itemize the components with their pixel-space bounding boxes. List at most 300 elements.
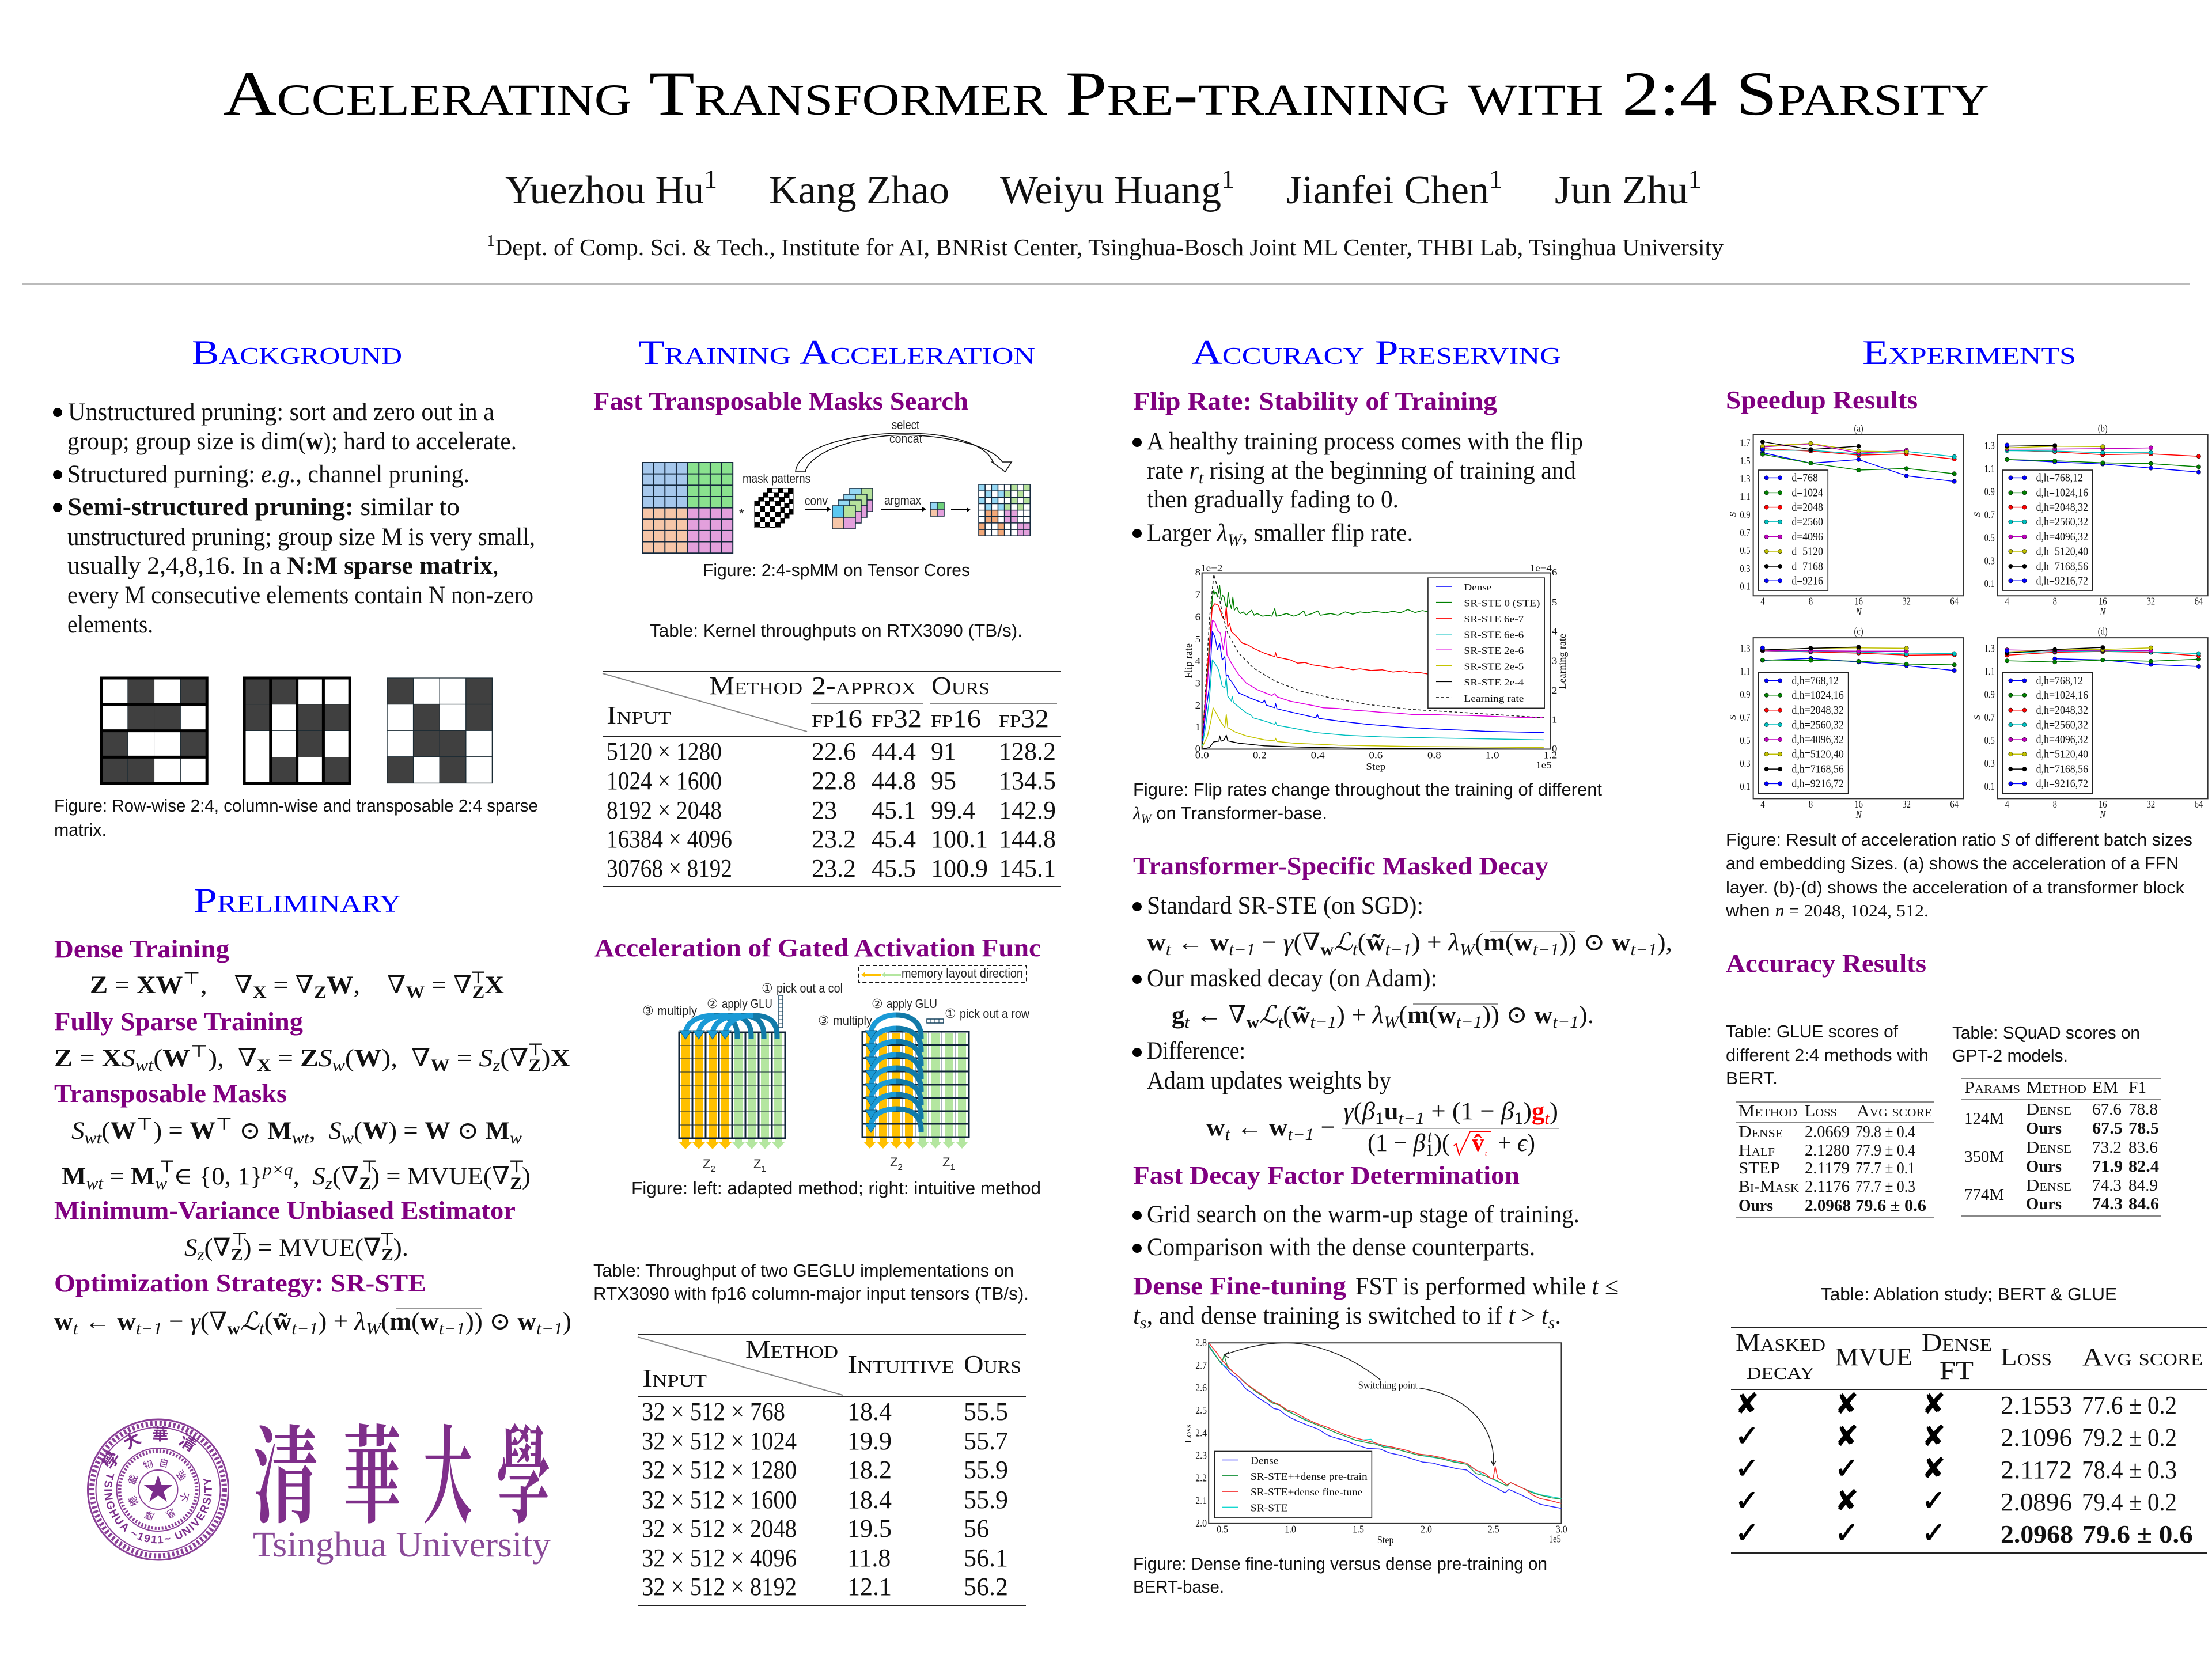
equation: sr-ste update: t−1	[439, 1319, 465, 1338]
table: glue scores: 77.7 ± 0.1	[1855, 1159, 1915, 1177]
table: squad scores: Ours	[2026, 1157, 2062, 1176]
chart: speedup panel b: d,h=2048,32	[2036, 501, 2088, 513]
table: kernel throughputs: 128.2	[999, 737, 1056, 766]
chart: speedup panel a: (a)	[1854, 422, 1863, 434]
arrow: select concat	[796, 433, 1012, 472]
bullet: difference	[1132, 1037, 1391, 1094]
input grid	[642, 463, 733, 553]
table: ablation study: 79.2 ± 0.2	[2082, 1423, 2177, 1452]
chart: speedup panel d: 16	[2099, 798, 2107, 810]
chart: speedup panel a	[1728, 422, 1964, 618]
equation: transposable masks first line: wt	[292, 1128, 309, 1147]
curve: sr-ste 0	[1202, 585, 1428, 748]
equation: masked decay: w	[1247, 1012, 1260, 1032]
equation: masked decay: ← ∇	[1190, 1002, 1247, 1029]
table: geglu throughput: 55.5	[964, 1397, 1008, 1426]
logotype: chinese name	[253, 1391, 551, 1544]
legend: flip rate: SR-STE 6e-6	[1464, 629, 1524, 640]
equation: transposable masks first line: (	[101, 1118, 110, 1145]
table: squad scores: Dense	[2026, 1100, 2071, 1119]
right diagram: intuitive method	[862, 1015, 969, 1149]
caption: sparse matrix figure: matrix.	[54, 820, 107, 840]
equation: adam update: g	[1532, 1098, 1545, 1125]
legend: loss chart: SR-STE	[1251, 1502, 1288, 1514]
chart: speedup panel d: 8	[2053, 798, 2057, 810]
equation: dense training: W	[327, 972, 353, 999]
equation: adam update: w	[1269, 1114, 1287, 1141]
equation: sr-ste update: w	[517, 1308, 536, 1335]
table: glue scores	[1736, 1102, 1934, 1217]
chart: speedup panel b: (b)	[2098, 422, 2108, 434]
equation: transposable masks second line: (∇	[332, 1163, 359, 1190]
equation: sr-ste update: )	[563, 1308, 571, 1335]
chart: flip rate curves: 1e−4	[1530, 563, 1552, 573]
panel: experiments	[1725, 334, 2208, 1553]
feature map stack	[832, 488, 873, 529]
caption: sparse matrix figure	[54, 796, 538, 840]
table: ablation study: ✘	[1735, 1387, 1759, 1421]
authors: Weiyu Huang	[1000, 168, 1222, 213]
equation: masked decay: (	[1399, 1002, 1407, 1029]
table: geglu throughput: 18.4	[847, 1397, 892, 1426]
chart: speedup panel c: d,h=9216,72	[1791, 777, 1844, 790]
equation: masked decay: w	[1534, 1002, 1552, 1029]
curve: sr-ste 2e-5	[1202, 708, 1544, 748]
chart: dense fine-tuning loss: 2.8	[1195, 1337, 1207, 1349]
equation: sr-ste update: λ	[353, 1308, 366, 1335]
equation: transposable masks second line: =	[103, 1163, 131, 1190]
chart: speedup panel a: d=2560	[1791, 515, 1823, 528]
table: kernel throughputs: fp16	[931, 704, 981, 733]
table: ablation study: Masked	[1736, 1328, 1825, 1357]
equation: masked decay: t	[1184, 1012, 1190, 1032]
chart: speedup panel c: 0.9	[1740, 688, 1751, 700]
table: geglu throughput: 32 × 512 × 1280	[642, 1456, 797, 1484]
table: kernel throughputs: fp32	[999, 704, 1049, 733]
chart: speedup panel a: d=5120	[1791, 545, 1823, 558]
chart: dense fine-tuning loss: Loss	[1183, 1424, 1194, 1443]
right labels: Z	[942, 1155, 950, 1169]
annotation: switching point: Switching point	[1358, 1380, 1418, 1391]
table: geglu throughput: Ours	[964, 1350, 1021, 1378]
table: kernel throughputs: 45.4	[872, 825, 916, 853]
chart: flip rate curves: 6	[1552, 567, 1557, 578]
chart: speedup panel a: 1.5	[1740, 455, 1751, 467]
equation: sr-ste update: −	[162, 1308, 190, 1335]
chart: flip rate curves: Flip rate	[1183, 643, 1194, 678]
equation: transposable masks second line: w	[155, 1173, 167, 1193]
table: kernel throughputs: 95	[931, 767, 956, 795]
equation: masked decay: ).	[1579, 1002, 1594, 1029]
equation: adam update: (1 − β	[1368, 1130, 1426, 1157]
right labels: ③	[818, 1014, 830, 1028]
equation: standard update: t	[1166, 940, 1171, 959]
chart: flip rate curves: 8	[1195, 567, 1200, 578]
table: glue scores: 79.6 ± 0.6	[1855, 1196, 1926, 1215]
chart: speedup panel a: 32	[1902, 595, 1911, 607]
equation: adam update: 1	[1514, 1108, 1523, 1128]
legend: flip rate	[1428, 578, 1544, 708]
bullet list: pruning: Unstructured pruning: sort and zero out in a	[68, 399, 494, 426]
table: geglu throughput: 32 × 512 × 1024	[642, 1427, 797, 1455]
chart: speedup panel b: 32	[2147, 595, 2155, 607]
annotation: switching point	[1224, 1343, 1496, 1465]
equation: transposable masks second line: ∈ {0, 1}	[167, 1163, 263, 1190]
table: geglu throughput: 18.2	[847, 1456, 892, 1484]
curve: dense	[1202, 632, 1544, 746]
bullet list: flip rate	[1132, 428, 1583, 550]
table: glue scores: Half	[1738, 1141, 1775, 1160]
equation: masked decay: ) +	[1336, 1002, 1373, 1029]
label: mask patterns: mask patterns	[743, 471, 810, 486]
subheading: dense training: Dense Training	[54, 935, 229, 963]
equation: masked decay: λ	[1372, 1002, 1384, 1029]
table: squad scores: Dense	[2026, 1138, 2071, 1157]
arrow: argmax: argmax	[884, 493, 921, 507]
curve: dense pre-train	[1209, 1346, 1561, 1499]
table: ablation study: Dense	[1922, 1328, 1992, 1357]
equation: adam update: t	[1225, 1124, 1230, 1144]
legend: loss chart: SR-STE+dense fine-tune	[1251, 1487, 1362, 1498]
equation: sr-ste update: )) ⊙	[465, 1308, 517, 1335]
right labels: 1	[950, 1162, 955, 1172]
table: ablation study: 2.1172	[2001, 1456, 2072, 1484]
equation: sr-ste update: w	[227, 1319, 241, 1338]
equation: mvue: ).	[393, 1234, 408, 1262]
chart: speedup panel c: 0.3	[1740, 757, 1751, 769]
text block: dense fine-tuning: .	[1555, 1302, 1561, 1330]
chart: dense fine-tuning loss: 2.0	[1195, 1517, 1207, 1529]
chart: dense fine-tuning loss: 2.6	[1195, 1382, 1207, 1394]
authors: Yuezhou Hu	[505, 168, 706, 213]
table: geglu throughput: 55.7	[964, 1427, 1008, 1455]
left labels: multiply	[657, 1003, 697, 1018]
chart: speedup panel b: 8	[2053, 595, 2057, 607]
chart: flip rate curves: 2	[1195, 700, 1200, 711]
table: kernel throughputs: 22.6	[812, 737, 856, 766]
chart: speedup panel d: 1.1	[1984, 665, 1995, 677]
bullet list: pruning: unstructured pruning; group size M is very small,	[67, 524, 535, 551]
bullet list: pruning: usually 2,4,8,16. In a N:M sparse matrix,	[67, 552, 499, 579]
caption: flip rate figure: Figure: Flip rates change throughout the training of different	[1133, 779, 1602, 800]
equation: adam update: 1	[1375, 1108, 1384, 1128]
table: ablation study: MVUE	[1835, 1343, 1912, 1371]
table: kernel throughputs: Ours	[931, 672, 990, 700]
equation: sr-ste update: t	[259, 1319, 264, 1338]
table: geglu throughput: 19.5	[847, 1514, 892, 1543]
label: concat: concat	[889, 431, 922, 446]
equation: masked decay: t−1	[1552, 1012, 1579, 1032]
equation: sr-ste update: w	[54, 1308, 73, 1335]
logo: tsinghua university	[87, 1391, 551, 1565]
table: kernel throughputs: 91	[931, 737, 956, 766]
chart: speedup panel d: d,h=4096,32	[2036, 733, 2088, 746]
table: squad scores: 350M	[1964, 1147, 2004, 1166]
equation: masked decay: (	[1283, 1002, 1291, 1029]
caption: speedup figure: when n = 2048, 1024, 512.	[1725, 900, 1929, 921]
table: geglu throughput: 55.9	[964, 1456, 1008, 1484]
chart: speedup panel c: 4	[1760, 798, 1765, 810]
chart: speedup panel a: d=1024	[1791, 486, 1823, 499]
equation: adam update: t−1	[1399, 1108, 1425, 1128]
table: squad scores: 84.6	[2128, 1195, 2159, 1213]
chart: speedup panel c: 8	[1809, 798, 1813, 810]
caption: geglu figure: Figure: left: adapted method; right: intuitive method	[631, 1178, 1041, 1198]
chart: flip rate curves: 3	[1552, 655, 1557, 666]
right labels: pick out a row	[960, 1006, 1029, 1021]
chart: speedup panel d: 1.3	[1984, 642, 1995, 654]
caption: geglu table	[593, 1260, 1029, 1304]
text block: dense fine-tuning: Dense Fine-tuning	[1133, 1272, 1346, 1300]
label: select: select	[892, 418, 919, 432]
equation: adam update: β	[1501, 1098, 1514, 1125]
left labels: ②	[707, 997, 718, 1012]
equation: mvue: Z	[231, 1245, 243, 1264]
equation: transposable masks second line: M	[62, 1163, 86, 1190]
table: kernel throughputs: fp32	[872, 704, 922, 733]
chart: dense fine-tuning loss: 1.0	[1285, 1524, 1296, 1535]
authors: Jianfei Chen	[1286, 168, 1489, 213]
table: ablation study: ✓	[1922, 1484, 1946, 1517]
caption: ablation table: Table: Ablation study; BERT & GLUE	[1821, 1284, 2117, 1304]
legend: flip rate: Dense	[1464, 582, 1491, 593]
table: squad scores: EM	[2092, 1078, 2118, 1097]
figure: column-wise sparse matrix	[244, 678, 350, 783]
bullet list: pruning: group; group size is dim(w); hard to accelerate.	[67, 428, 517, 455]
chart: speedup panel a: d=4096	[1791, 530, 1823, 543]
table: squad scores: 82.4	[2128, 1157, 2159, 1176]
table: ablation study	[1731, 1327, 2207, 1553]
equation: transposable masks second line: wt	[86, 1173, 104, 1193]
table: squad scores: Ours	[2026, 1195, 2062, 1213]
chart: flip rate curves: 2	[1552, 685, 1557, 696]
chart: speedup panel a: 0.1	[1740, 580, 1751, 592]
table: ablation study: Loss	[2001, 1343, 2052, 1371]
bullet list: flip rate: rate r	[1147, 457, 1199, 484]
chart: speedup panel d: 0.5	[1984, 734, 1995, 746]
table: ablation study: ✘	[1922, 1419, 1946, 1453]
equation: masked decay: t−1	[1456, 1012, 1482, 1032]
heading: training acceleration: Training Acceleration	[638, 334, 1035, 372]
equation: dense training	[90, 968, 504, 1002]
table: kernel throughputs: 5120 × 1280	[607, 737, 722, 766]
bullet list: flip rate: W	[1228, 530, 1243, 550]
chart: flip rate curves: 6	[1195, 611, 1200, 622]
equation: dense training: ⊤	[470, 968, 486, 987]
chart: flip rate curves: 5	[1552, 597, 1557, 608]
authors	[505, 164, 1702, 213]
right labels	[818, 997, 1029, 1172]
table: kernel throughputs: 23	[812, 796, 837, 824]
table: glue scores: 2.1176	[1805, 1177, 1850, 1196]
subheading: accuracy results: Accuracy Results	[1726, 949, 1926, 978]
chart: flip rate curves: 1e−2	[1200, 563, 1222, 573]
chart: speedup panel c: d,h=2048,32	[1791, 703, 1844, 716]
caption: glue table: different 2:4 methods with	[1726, 1045, 1929, 1065]
equation: adam update	[1206, 1098, 1559, 1160]
chart: speedup panel b: 0.7	[1984, 509, 1995, 521]
equation: mvue	[184, 1230, 408, 1264]
table: geglu throughput: 12.1	[847, 1573, 892, 1601]
chart: speedup panel a: 0.5	[1740, 544, 1751, 556]
table: kernel throughputs: 144.8	[999, 825, 1056, 853]
chart: speedup panel b: 0.9	[1984, 486, 1995, 498]
chart: dense fine-tuning loss: 1.5	[1353, 1524, 1364, 1535]
table: kernel throughputs: 100.9	[931, 854, 988, 882]
chart: speedup panel a: 64	[1950, 595, 1959, 607]
chart: speedup panel c: 16	[1854, 798, 1863, 810]
chart: speedup panel c: d,h=7168,56	[1791, 763, 1844, 775]
equation: transposable masks second line: Z	[510, 1173, 522, 1193]
subheading: optimization strategy: Optimization Strategy: SR-STE	[54, 1269, 426, 1297]
caption: speedup figure	[1725, 830, 2192, 921]
equation: standard update: (	[1358, 929, 1366, 956]
equation: transposable masks second line: ⊤	[159, 1157, 175, 1176]
subheading: masked decay: Transformer-Specific Masked Decay	[1133, 852, 1548, 880]
chart: speedup panel d: 4	[2005, 798, 2009, 810]
chart: dense fine-tuning loss: 2.5	[1195, 1405, 1207, 1416]
chart: flip rate curves: 0.6	[1369, 749, 1382, 760]
table: glue scores: 77.7 ± 0.3	[1855, 1177, 1915, 1196]
table: kernel throughputs: 30768 × 8192	[607, 854, 732, 882]
legend: flip rate: SR-STE 6e-7	[1464, 613, 1524, 624]
logotype: chinese name: 學	[495, 1391, 551, 1544]
table: kernel throughputs: 8192 × 2048	[607, 796, 722, 824]
equation: transposable masks first line: ,	[309, 1118, 328, 1145]
chart: speedup panel c: 0.1	[1740, 780, 1751, 792]
table: squad scores: Dense	[2026, 1176, 2071, 1195]
equation: transposable masks first line: M	[267, 1118, 292, 1145]
equation: standard update: ←	[1171, 929, 1210, 956]
equation: adam update: u	[1384, 1098, 1399, 1125]
table: squad scores: 74.3	[2092, 1176, 2122, 1195]
bullet list: flip rate: Larger λ	[1147, 520, 1228, 547]
logotype: chinese name: 華	[343, 1391, 401, 1544]
equation: dense training: Z = XW	[90, 972, 179, 999]
table: ablation study: ✓	[1735, 1419, 1759, 1453]
caption: flip rate figure: on Transformer-base.	[1152, 803, 1327, 823]
table: geglu throughput: 11.8	[847, 1544, 891, 1572]
equation: transposable masks second line	[62, 1157, 531, 1193]
chart: flip rate curves: 4	[1195, 656, 1200, 666]
subheading: fast transposable masks search: Fast Transposable Masks Search	[593, 387, 968, 415]
chart: speedup panel b: 0.5	[1984, 532, 1995, 544]
left labels: 1	[761, 1164, 766, 1174]
chart: dense fine-tuning loss: Step	[1377, 1535, 1394, 1546]
chart: speedup panel a: d=9216	[1791, 574, 1823, 587]
text block: dense fine-tuning: s	[1548, 1313, 1555, 1332]
table: squad scores: 71.9	[2092, 1157, 2123, 1176]
logotype: chinese name: 清	[253, 1391, 319, 1544]
equation: standard update	[1147, 929, 1672, 959]
table: ablation study: Avg score	[2082, 1343, 2203, 1371]
table: geglu throughput: Input	[642, 1364, 707, 1392]
chart: speedup panel c: (c)	[1854, 625, 1863, 637]
table: ablation study: 77.6 ± 0.2	[2082, 1391, 2177, 1419]
chart: dense fine-tuning loss: 2.4	[1195, 1427, 1207, 1439]
bullet list: pruning: Semi-structured pruning: similar to	[67, 494, 460, 521]
table: ablation study: FT	[1940, 1357, 1974, 1385]
subheading: speedup results: Speedup Results	[1726, 386, 1918, 414]
table: kernel throughputs: 145.1	[999, 854, 1056, 882]
chart: speedup panel b: S	[1972, 512, 1982, 517]
chart: speedup panel c: 0.5	[1740, 734, 1751, 746]
panel: background	[53, 334, 538, 840]
equation: standard update: −	[1255, 929, 1283, 956]
equation: masked decay	[1172, 1002, 1594, 1032]
chart: speedup panel a: d=768	[1791, 471, 1818, 484]
chart: speedup panel d: (d)	[2098, 625, 2108, 637]
table: ablation study: ✘	[1835, 1419, 1859, 1453]
equation: standard update: t−1	[1533, 940, 1559, 959]
table: glue scores: Method	[1738, 1102, 1797, 1120]
equation: fully sparse training: ), ∇	[208, 1045, 257, 1072]
table: glue scores: 77.9 ± 0.4	[1855, 1141, 1915, 1160]
chart: speedup panel c: S	[1728, 715, 1737, 720]
figure: 2:4-spmm on tensor cores	[642, 418, 1030, 553]
chart: flip rate curves: 1.2	[1543, 749, 1557, 760]
right labels: ②	[872, 997, 883, 1012]
legend: flip rate: Learning rate	[1464, 693, 1524, 704]
chart: speedup panel b: d,h=1024,16	[2036, 486, 2088, 499]
legend: memory layout direction: memory layout direction	[902, 966, 1023, 980]
caption: dense fine-tuning figure	[1133, 1554, 1547, 1597]
table: squad scores: 67.6	[2092, 1100, 2122, 1119]
caption: kernel throughput table: Table: Kernel throughputs on RTX3090 (TB/s).	[650, 620, 1022, 641]
output sparse grid	[979, 484, 1030, 536]
bullet: difference: Adam updates weights by	[1147, 1067, 1391, 1094]
caption: flip rate figure: λ	[1132, 803, 1141, 823]
chart: speedup panel d: N	[2100, 808, 2106, 820]
equation: mvue: S	[184, 1234, 197, 1262]
equation: mvue: (∇	[204, 1234, 231, 1262]
table: kernel throughputs: 45.1	[872, 796, 916, 824]
equation: transposable masks second line: Z	[359, 1173, 371, 1193]
table: geglu throughput	[638, 1335, 1026, 1605]
table: ablation study: ✓	[1735, 1452, 1759, 1485]
table: geglu throughput: 56.1	[964, 1544, 1008, 1572]
logotype: chinese name: 大	[423, 1391, 472, 1544]
equation: standard update: t−1	[1385, 940, 1412, 959]
chart: dense fine-tuning loss	[1183, 1337, 1567, 1546]
chart: flip rate curves: 7	[1195, 589, 1200, 600]
subheading: fast decay factor determination: Fast Decay Factor Determination	[1133, 1161, 1520, 1190]
equation: sr-ste update	[54, 1308, 571, 1338]
left labels: Z	[703, 1157, 710, 1171]
chart: speedup panel a: 16	[1854, 595, 1863, 607]
chart: speedup panel b: 0.1	[1984, 577, 1995, 589]
table: squad scores: 73.2	[2092, 1138, 2122, 1157]
chart: speedup panel d	[1972, 625, 2208, 820]
equation: adam update: ←	[1230, 1114, 1269, 1141]
equation: mvue: z	[196, 1245, 204, 1264]
text block: dense fine-tuning	[1133, 1272, 1618, 1332]
chart: dense fine-tuning loss: 2.3	[1195, 1450, 1207, 1461]
chart: speedup panel b: d,h=4096,32	[2036, 530, 2088, 543]
bullet: difference: Difference:	[1147, 1037, 1245, 1065]
chart: dense fine-tuning loss: 2.5	[1488, 1524, 1499, 1535]
table: squad scores: 124M	[1964, 1109, 2004, 1128]
equation: sr-ste update: γ(∇	[190, 1308, 226, 1335]
equation: sr-ste update: t−1	[536, 1319, 563, 1338]
caption: squad table: Table: SQuAD scores on	[1952, 1022, 2140, 1043]
table: geglu throughput: 19.9	[847, 1427, 892, 1455]
table: kernel throughputs: 22.8	[812, 767, 856, 795]
caption: glue table: Table: GLUE scores of	[1726, 1021, 1898, 1041]
equation: fully sparse training: X	[257, 1055, 271, 1075]
chart: flip rate curves: 3	[1195, 677, 1200, 688]
table: ablation study: 78.4 ± 0.3	[2082, 1456, 2177, 1484]
